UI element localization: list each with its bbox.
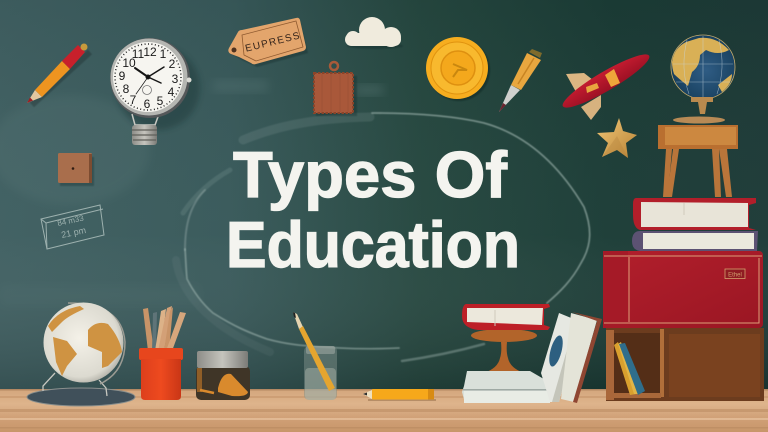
- chalk sketch text: 84 m33: [57, 213, 85, 228]
- pencils: [143, 306, 186, 351]
- purple book: [632, 231, 758, 251]
- icon: rocket: [558, 48, 654, 120]
- title line 2: Education: [226, 208, 520, 281]
- clock numerals: 5: [157, 94, 164, 108]
- icon: pencil top left: [27, 44, 90, 105]
- book on wooden pedestal: [462, 304, 550, 403]
- title: [226, 138, 520, 281]
- small books: [614, 342, 645, 395]
- leaning books: [541, 312, 602, 403]
- two pale books: [462, 371, 550, 403]
- book stack: [632, 198, 758, 251]
- clock numerals: 3: [172, 72, 179, 86]
- chalk ellipse: [176, 113, 590, 361]
- clock numerals: 12: [143, 45, 157, 59]
- clock numerals: 1: [160, 47, 167, 61]
- icon: cloud: [345, 17, 403, 49]
- clock numerals: 6: [144, 97, 151, 111]
- icon: pen: [499, 49, 542, 112]
- small table: [658, 125, 738, 149]
- red book on pedestal: [462, 304, 550, 330]
- icon: wooden price tag: [228, 18, 308, 67]
- globe stand: [691, 97, 713, 114]
- icon: gold star: [597, 118, 637, 158]
- icon: gold coin: [426, 37, 490, 101]
- globe top right: [671, 35, 735, 99]
- red book: [633, 198, 756, 230]
- title line 1: Types Of: [233, 138, 507, 211]
- icon: clock on light bulb base: [110, 38, 200, 145]
- chalk sketch: eraser: [41, 205, 104, 249]
- clock hands: [135, 67, 164, 94]
- clock numerals: [119, 45, 179, 111]
- glass jar with pencil: [293, 312, 337, 400]
- clock numerals: 2: [169, 57, 176, 71]
- pedestal: [471, 329, 537, 380]
- icon: globe on table: [658, 35, 738, 197]
- red trunk: Ethel: [728, 272, 742, 278]
- jar with specimen: [196, 351, 250, 400]
- bulb screw base: [132, 114, 159, 145]
- yellow pencil on desk: [363, 389, 436, 401]
- clock numerals: 11: [132, 47, 145, 61]
- clock numerals: 8: [123, 82, 130, 96]
- clock numerals: 4: [168, 85, 175, 99]
- red trunk: [603, 251, 763, 328]
- globe bottom left: [27, 302, 135, 406]
- icon: wooden price tag: EUPRESS: [244, 30, 302, 55]
- wooden desk: [0, 389, 768, 432]
- clock numerals: 10: [122, 56, 136, 70]
- pencil cup: [139, 306, 186, 400]
- clock numerals: 7: [130, 93, 137, 107]
- pencil in jar: [293, 312, 335, 391]
- chalk sketch: eraser: 21 pm: [60, 225, 87, 240]
- clock numerals: 9: [119, 69, 126, 83]
- icon: wooden stamp tag: [314, 62, 357, 116]
- wooden shelf: [606, 328, 764, 401]
- icon: wooden cube: [58, 153, 94, 186]
